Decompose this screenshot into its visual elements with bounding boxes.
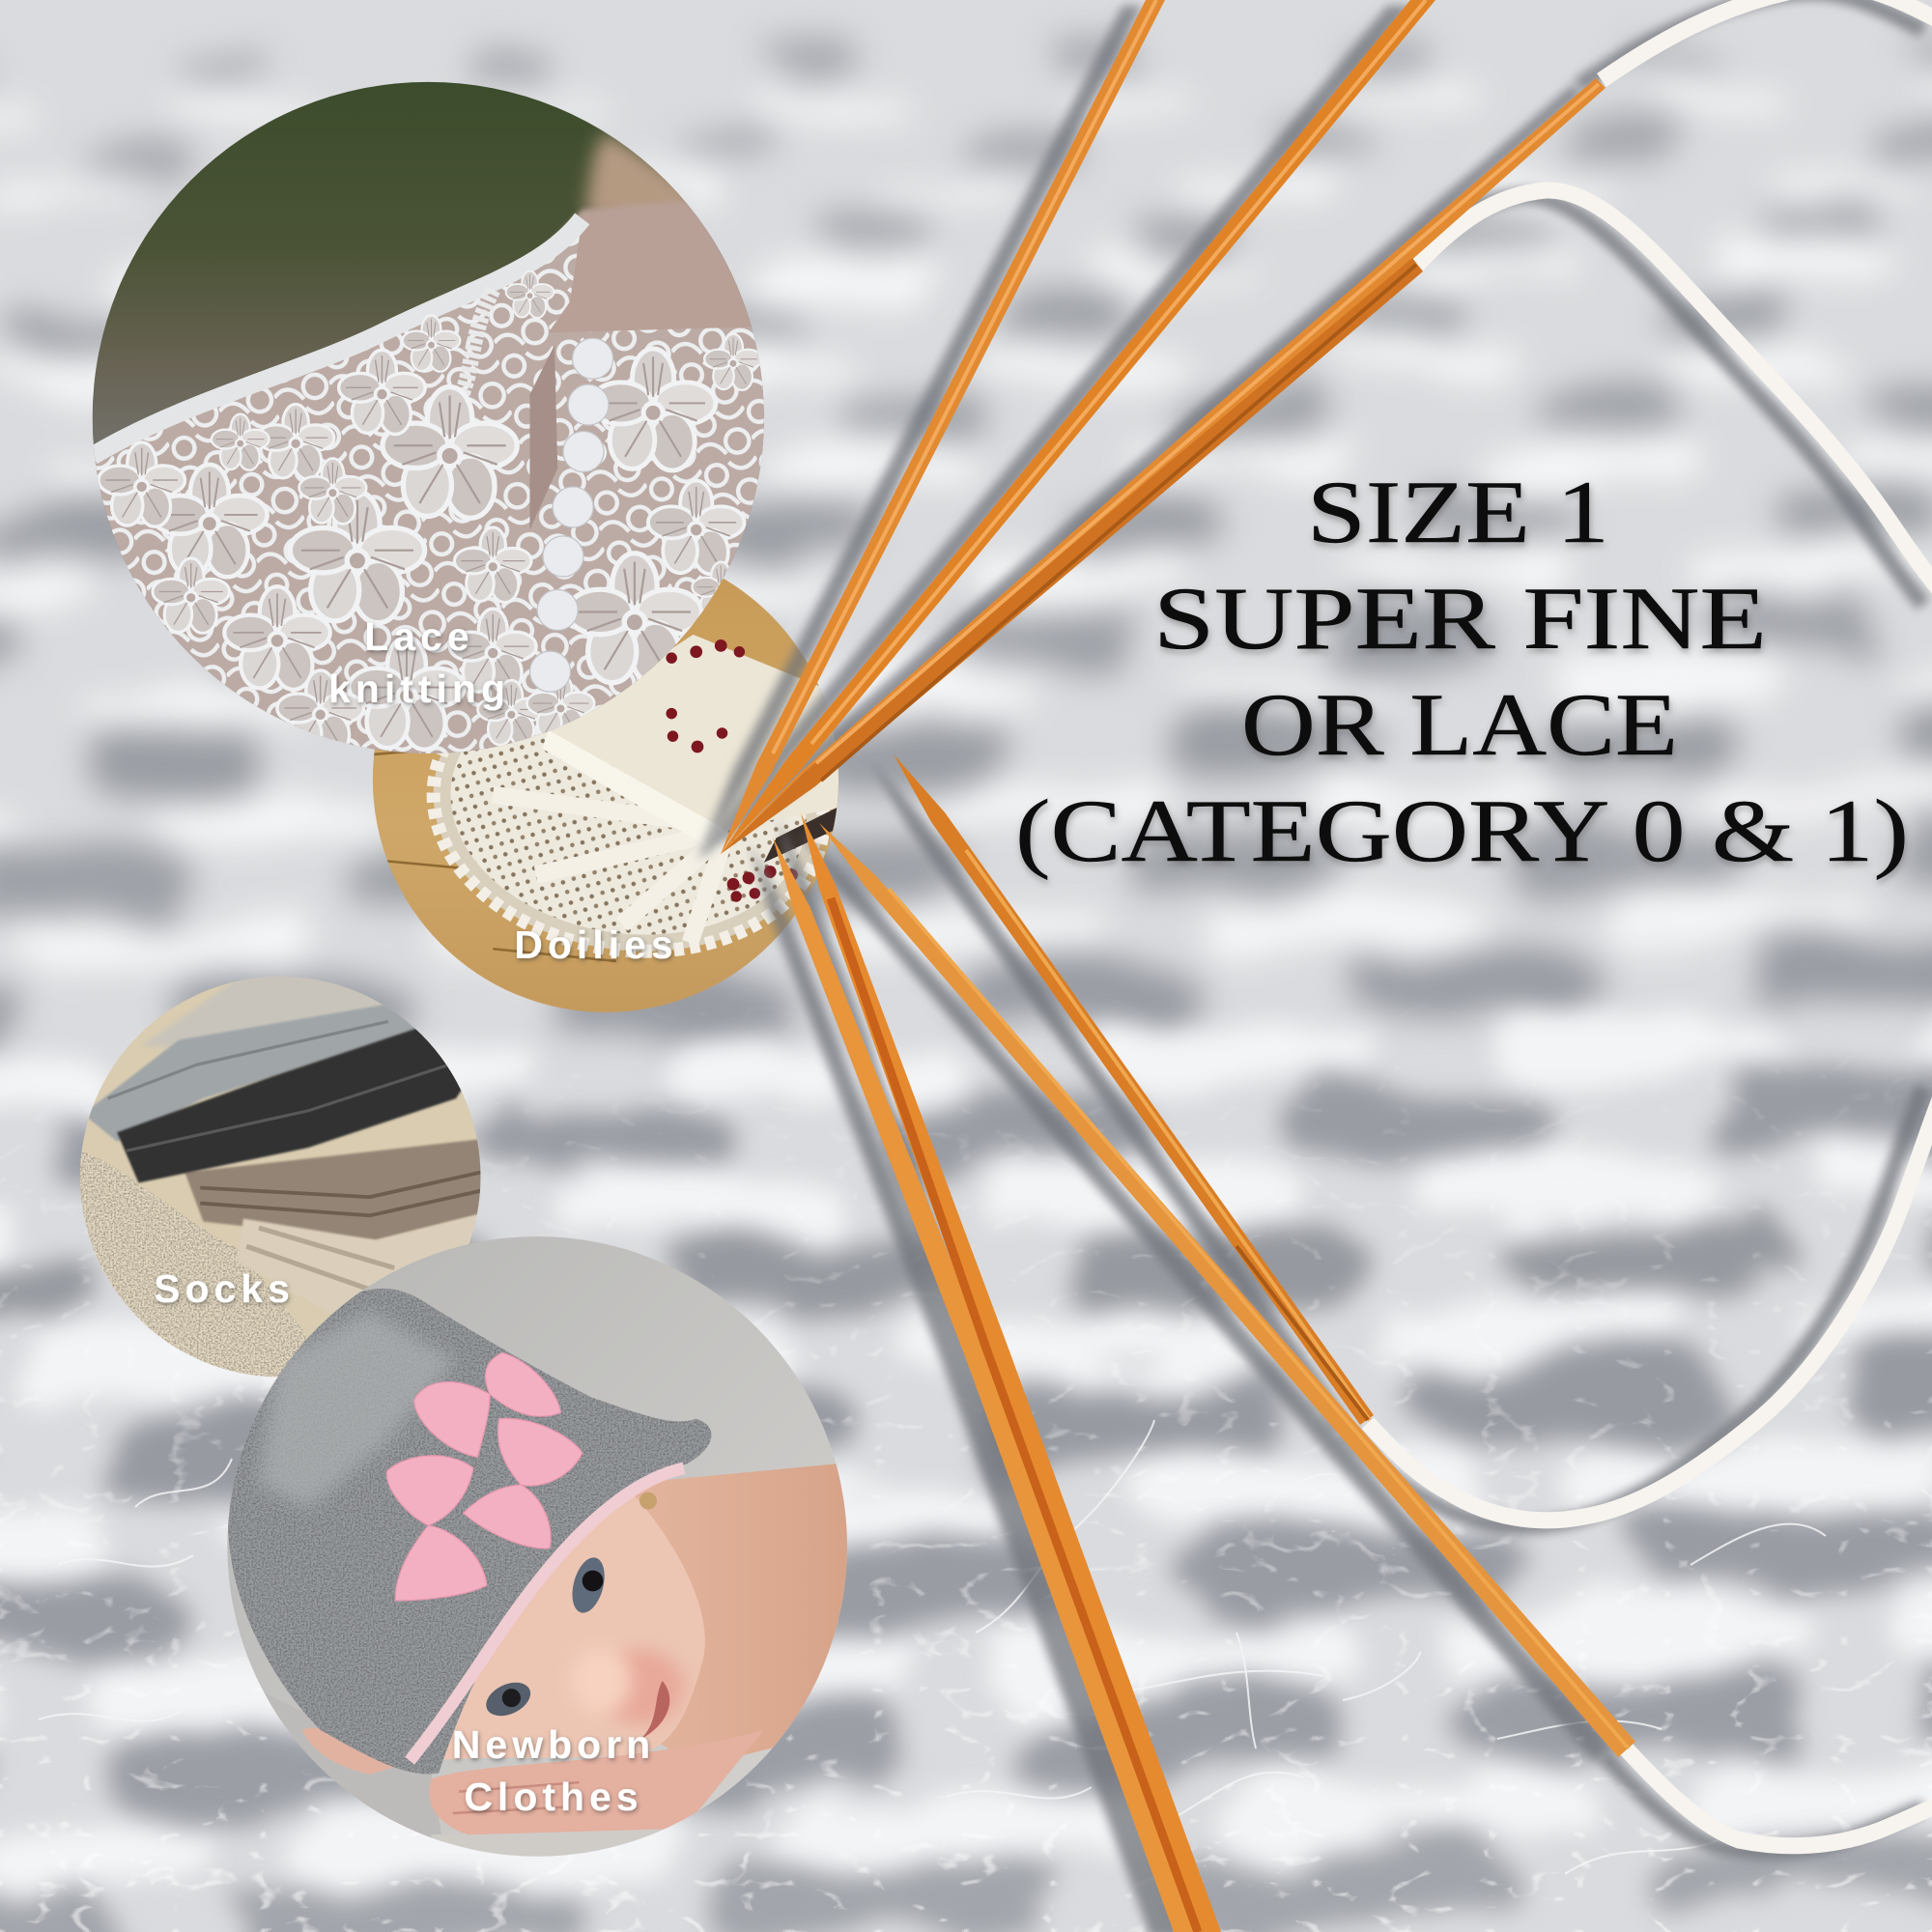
hair bbox=[576, 128, 703, 224]
title line 2: SUPER FINE bbox=[1153, 569, 1767, 668]
bows bbox=[386, 1353, 582, 1601]
needle highlights and dark seams bbox=[773, 0, 1629, 1932]
rosary bbox=[666, 639, 798, 902]
title: yarn category bbox=[1015, 463, 1909, 880]
needle: up 3 bbox=[721, 78, 1605, 854]
label: doilies: Doilies bbox=[514, 923, 678, 967]
label: lace knitting: Lace bbox=[364, 614, 474, 659]
ear bbox=[639, 1492, 657, 1510]
shoulder bbox=[554, 1462, 857, 1767]
lace body bbox=[93, 218, 764, 764]
eyes bbox=[567, 1554, 610, 1616]
arm and hand bbox=[429, 1730, 764, 1834]
label: socks: Socks bbox=[154, 1266, 295, 1311]
lace flowers bbox=[99, 271, 762, 754]
needle: right 2 bbox=[819, 823, 1635, 1757]
photo circle: lace knitting bbox=[93, 80, 770, 764]
fleece bbox=[74, 1151, 345, 1385]
needle: up 2 bbox=[721, 0, 1435, 854]
title line 4: (CATEGORY 0 & 1) bbox=[1015, 781, 1909, 880]
skin bbox=[435, 200, 764, 753]
label: lace knitting: knitting bbox=[328, 667, 510, 711]
photo circle: newborn clothes bbox=[222, 1231, 857, 1865]
book bbox=[549, 635, 844, 829]
needle: up 4 bbox=[721, 258, 1423, 854]
title line 1: SIZE 1 bbox=[1307, 463, 1609, 561]
photo circle: socks bbox=[74, 972, 487, 1385]
doily bbox=[427, 730, 831, 958]
sheet bbox=[265, 1693, 443, 1860]
nose and mouth bbox=[570, 1647, 632, 1715]
needle cables: white plastic cords bbox=[1368, 0, 1932, 1846]
label: newborn clothes: Clothes bbox=[464, 1775, 643, 1819]
needle: up 1 bbox=[721, 0, 1165, 854]
photo circle: doilies bbox=[373, 578, 838, 1012]
labels on photos bbox=[154, 614, 678, 1819]
needle: right 1 bbox=[894, 754, 1374, 1425]
needle: down 2 bbox=[773, 838, 1198, 1932]
face bbox=[431, 1496, 705, 1761]
knitting needles: orange bamboo tips bbox=[721, 0, 1635, 1932]
hat bbox=[228, 1289, 711, 1775]
needle: down 1 bbox=[801, 813, 1221, 1932]
buttons bbox=[530, 338, 613, 692]
title line 3: OR LACE bbox=[1241, 675, 1678, 774]
label: newborn clothes: Newborn bbox=[452, 1722, 655, 1767]
